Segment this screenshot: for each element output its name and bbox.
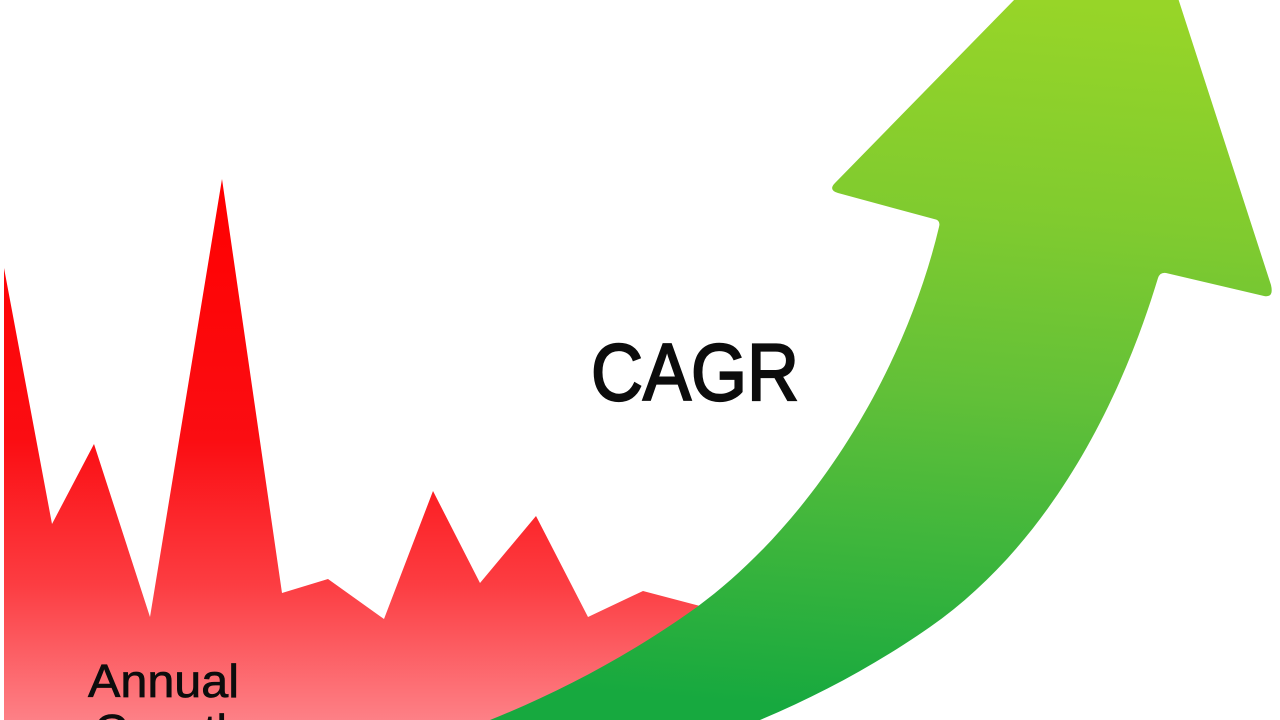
label: CAGR: CAGR: [591, 328, 799, 418]
label: Annual Growth: Annual: [88, 655, 239, 707]
red volatile annual growth area chart: [4, 179, 700, 720]
label: Annual Growth: [88, 663, 236, 720]
green upward CAGR arrow: [470, 0, 1272, 720]
